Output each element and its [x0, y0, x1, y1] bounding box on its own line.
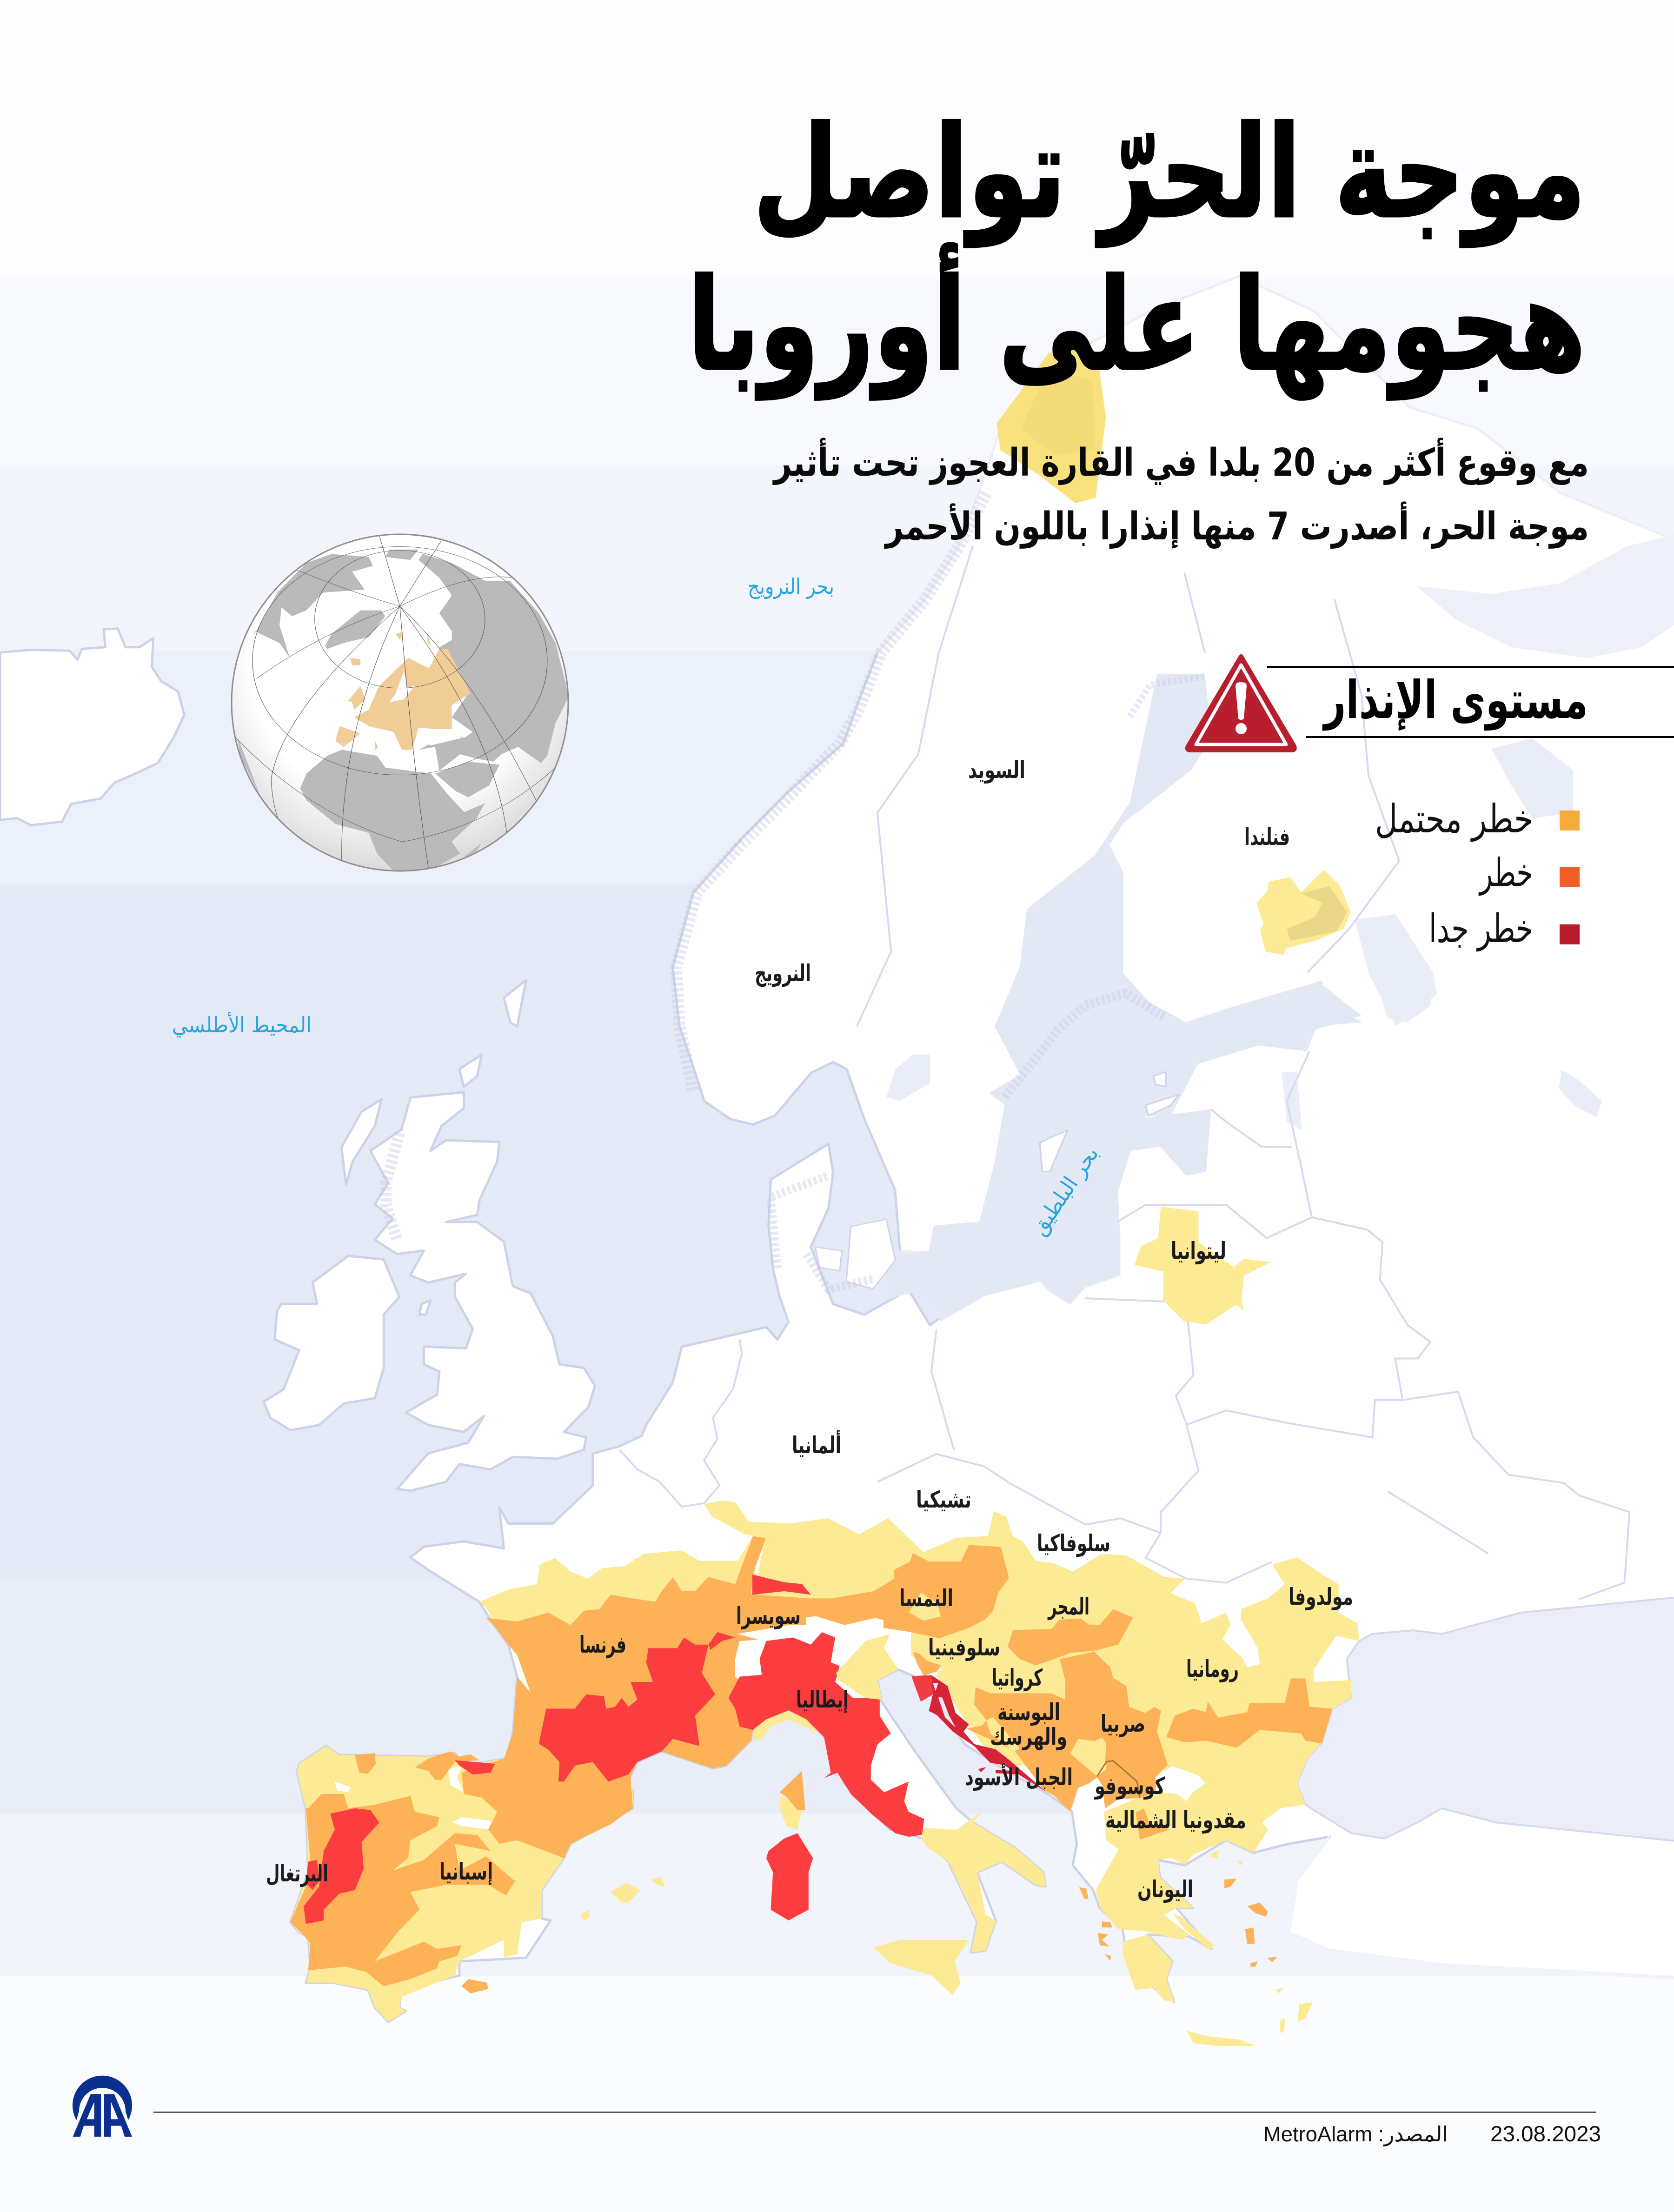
yellow: Ligurian coast: [753, 1710, 820, 1740]
footer: [73, 2076, 1601, 2146]
country labels: الجبل الأسود: [965, 1763, 1073, 1791]
warning: northern Sweden: [997, 343, 1106, 503]
globe sphere: [232, 534, 568, 871]
globe land and graticule: [234, 535, 569, 871]
red: Swiss north: [752, 1574, 811, 1595]
warnings: central and south-east Europe: [704, 1501, 1359, 2046]
yellow: Ibiza: [580, 1910, 590, 1920]
yellow: Corsica: [780, 1796, 802, 1830]
red: Dalmatian islets: [978, 1767, 1020, 1774]
yellow: northern France: [479, 1536, 757, 1630]
faint Turkish coast: [1289, 1837, 1674, 1979]
warning: Finland: [1256, 870, 1351, 955]
globe locator: [232, 534, 569, 871]
land: Iceland: [0, 628, 184, 825]
country labels: مقدونيا الشمالية: [1105, 1807, 1246, 1834]
legend item: possible danger: خطر محتمل: [1375, 796, 1533, 842]
legend heading: مستوى الإنذار: [1322, 670, 1588, 731]
land: continental Europe: [411, 1144, 1674, 2002]
orange: Corsica north: [780, 1771, 805, 1810]
warning: Lithuania: [1135, 1207, 1271, 1324]
country labels: اليونان: [1137, 1876, 1193, 1903]
legend rules: [1267, 667, 1674, 737]
yellow: Aegean islands: [1211, 1851, 1313, 2033]
red: Alpine border: [709, 1632, 735, 1650]
globe outline: [232, 534, 568, 871]
land: Hebrides and small islands: [341, 980, 526, 1315]
country labels: كوسوفو: [1094, 1773, 1165, 1800]
subtitle: [772, 438, 1589, 549]
Europe highlighted: [335, 631, 471, 751]
logo: Anadolu Agency: [73, 2076, 132, 2137]
border: Kosovo: [1097, 1761, 1140, 1798]
subtitle: مع وقوع أكثر من 20 بلدا في القارة العجوز تحت تأثير: [772, 438, 1589, 485]
sea: Baltic Sea: [884, 976, 1362, 1321]
country labels: فرنسا: [579, 1631, 626, 1659]
legend item: high danger: خطر جدا: [1429, 906, 1533, 952]
orange: Basque area: [415, 1751, 479, 1780]
orange: Austria: [884, 1545, 1009, 1638]
speckled fjord coast: Norway, Scotland, Stockholm archipelago: [386, 492, 1205, 1289]
yellow: southern Italy: [921, 1810, 1046, 1953]
yellow: Sandzak patch: [1070, 1738, 1106, 1776]
yellow: Mallorca: [611, 1883, 640, 1903]
country labels: البرتغال: [266, 1860, 328, 1887]
graticule: [236, 535, 562, 871]
white gaps in Iberia: [335, 1766, 493, 1830]
red: southern France: [539, 1637, 715, 1781]
country labels: السويد: [968, 757, 1025, 784]
orange: Swiss and Tyrol band: [749, 1579, 911, 1627]
country labels: كرواتيا: [992, 1664, 1043, 1692]
sea labels: [172, 574, 1104, 1240]
orange: northern Spain patches: [355, 1753, 376, 1774]
orange: western Iberia: [290, 1794, 515, 1986]
sea gaps along Dalmatia: [933, 1683, 956, 1727]
country labels: النمسا: [899, 1585, 953, 1612]
country labels: ألمانيا: [792, 1430, 841, 1459]
country labels: [266, 757, 1353, 1903]
yellow: Germany, Hungary, Romania, Bulgaria block: [704, 1501, 1359, 1940]
country labels: المجر: [1047, 1593, 1089, 1621]
seam patch over continental top edge: [1123, 1160, 1674, 1174]
label: Baltic Sea: بحر البلطيق: [1026, 1142, 1104, 1240]
islands in the Baltic and Danish straits: [815, 1072, 1178, 1289]
yellow: Austrian patch: [909, 1593, 941, 1621]
country labels: فنلندا: [1244, 824, 1290, 850]
red: north Spain: [455, 1760, 495, 1774]
country labels: سويسرا: [736, 1602, 801, 1630]
warnings: Iberia, France and western islands: [290, 1536, 924, 2022]
subtitle: موجة الحر، أصدرت 7 منها إنذارا باللون الأحمر: [884, 501, 1589, 549]
country labels: إيطاليا: [796, 1686, 849, 1714]
country labels: إسبانيا: [439, 1858, 493, 1886]
legend panel: [1188, 657, 1674, 952]
red: Istria brighter: [911, 1675, 933, 1701]
red: Dalmatian coast: [911, 1675, 1046, 1792]
land: Great Britain: [371, 1092, 595, 1491]
red: northern and central Italy: [729, 1632, 924, 1837]
yellow: Veneto: [836, 1634, 898, 1700]
icon: warning triangle: [1188, 657, 1295, 750]
yellow: Euboea: [1172, 1913, 1214, 1951]
country borders: [619, 546, 1629, 1599]
white gap: Bulgaria border: [1156, 1766, 1205, 1801]
sea: Gulf of Bothnia: [995, 674, 1362, 1116]
legend item: danger: خطر: [1478, 850, 1533, 896]
Black Sea on globe: [429, 732, 462, 745]
country labels: سلوفاكيا: [1037, 1530, 1110, 1557]
lakes: [886, 738, 1602, 1130]
orange: Hungary: [1008, 1609, 1133, 1665]
land: Iberia: [290, 1746, 633, 2022]
orange: Slovenia: [913, 1652, 941, 1676]
gray continents: [234, 550, 569, 871]
yellow: Menorca: [651, 1877, 665, 1887]
land: Ireland: [264, 1256, 399, 1430]
land masses: [0, 276, 1674, 2022]
orange: Greek islands: [1079, 1879, 1277, 1966]
red: Sardinia: [766, 1833, 813, 1920]
coast: southern Norway and Sweden: [673, 653, 900, 1250]
country labels: ليتوانيا: [1171, 1237, 1226, 1265]
country labels: والهرسك: [990, 1723, 1067, 1751]
white: Alpine gap: [737, 1618, 882, 1655]
orange: Almeria islet: [462, 1979, 488, 1993]
country labels: سلوفينيا: [928, 1634, 1000, 1661]
orange: North Macedonia: [1136, 1808, 1170, 1840]
Baltic gap on globe: [390, 671, 414, 702]
label: Norwegian Sea: بحر النرويج: [748, 574, 834, 599]
title: [688, 100, 1586, 400]
country labels: البوسنة: [997, 1699, 1060, 1726]
yellow: Crete: [1187, 2031, 1256, 2046]
date: 23.08.2023: [1490, 2121, 1601, 2146]
yellow: Peloponnese: [1123, 1934, 1175, 2002]
label: Atlantic Ocean: المحيط الأطلسي: [172, 1011, 312, 1038]
yellow: Neretva wedge: [986, 1717, 1020, 1751]
orange: Serbia, Bosnia, Montenegro: [966, 1652, 1168, 1812]
orange: France and north-east Spain: [462, 1536, 806, 1858]
country labels: تشيكيا: [916, 1486, 971, 1513]
country labels: مولدوفا: [1289, 1583, 1353, 1611]
country labels: صربيا: [1101, 1710, 1145, 1738]
warnings: Austria and western Balkans detail: [884, 1545, 1205, 1840]
base map: land and seas: [0, 276, 1674, 2022]
red: Portugal coast patch: [306, 1860, 319, 1890]
yellow: Iberia: [290, 1746, 633, 2022]
heat warning overlay on map: [290, 343, 1359, 2046]
footer rule: [153, 2112, 1596, 2113]
source: MetroAlarm :المصدر: [1263, 2122, 1448, 2146]
sea: Black Sea: [1297, 1595, 1674, 1844]
yellow: Sicily: [874, 1940, 969, 1995]
country labels: النرويج: [755, 960, 811, 987]
land: Scandinavia and northern Russia: [673, 276, 1674, 1267]
sea: White Sea: [1416, 530, 1674, 658]
orange: Romania and Bulgaria band: [1166, 1678, 1332, 1748]
red: Portugal and western Spain: [304, 1808, 379, 1924]
country labels: رومانيا: [1186, 1655, 1239, 1683]
